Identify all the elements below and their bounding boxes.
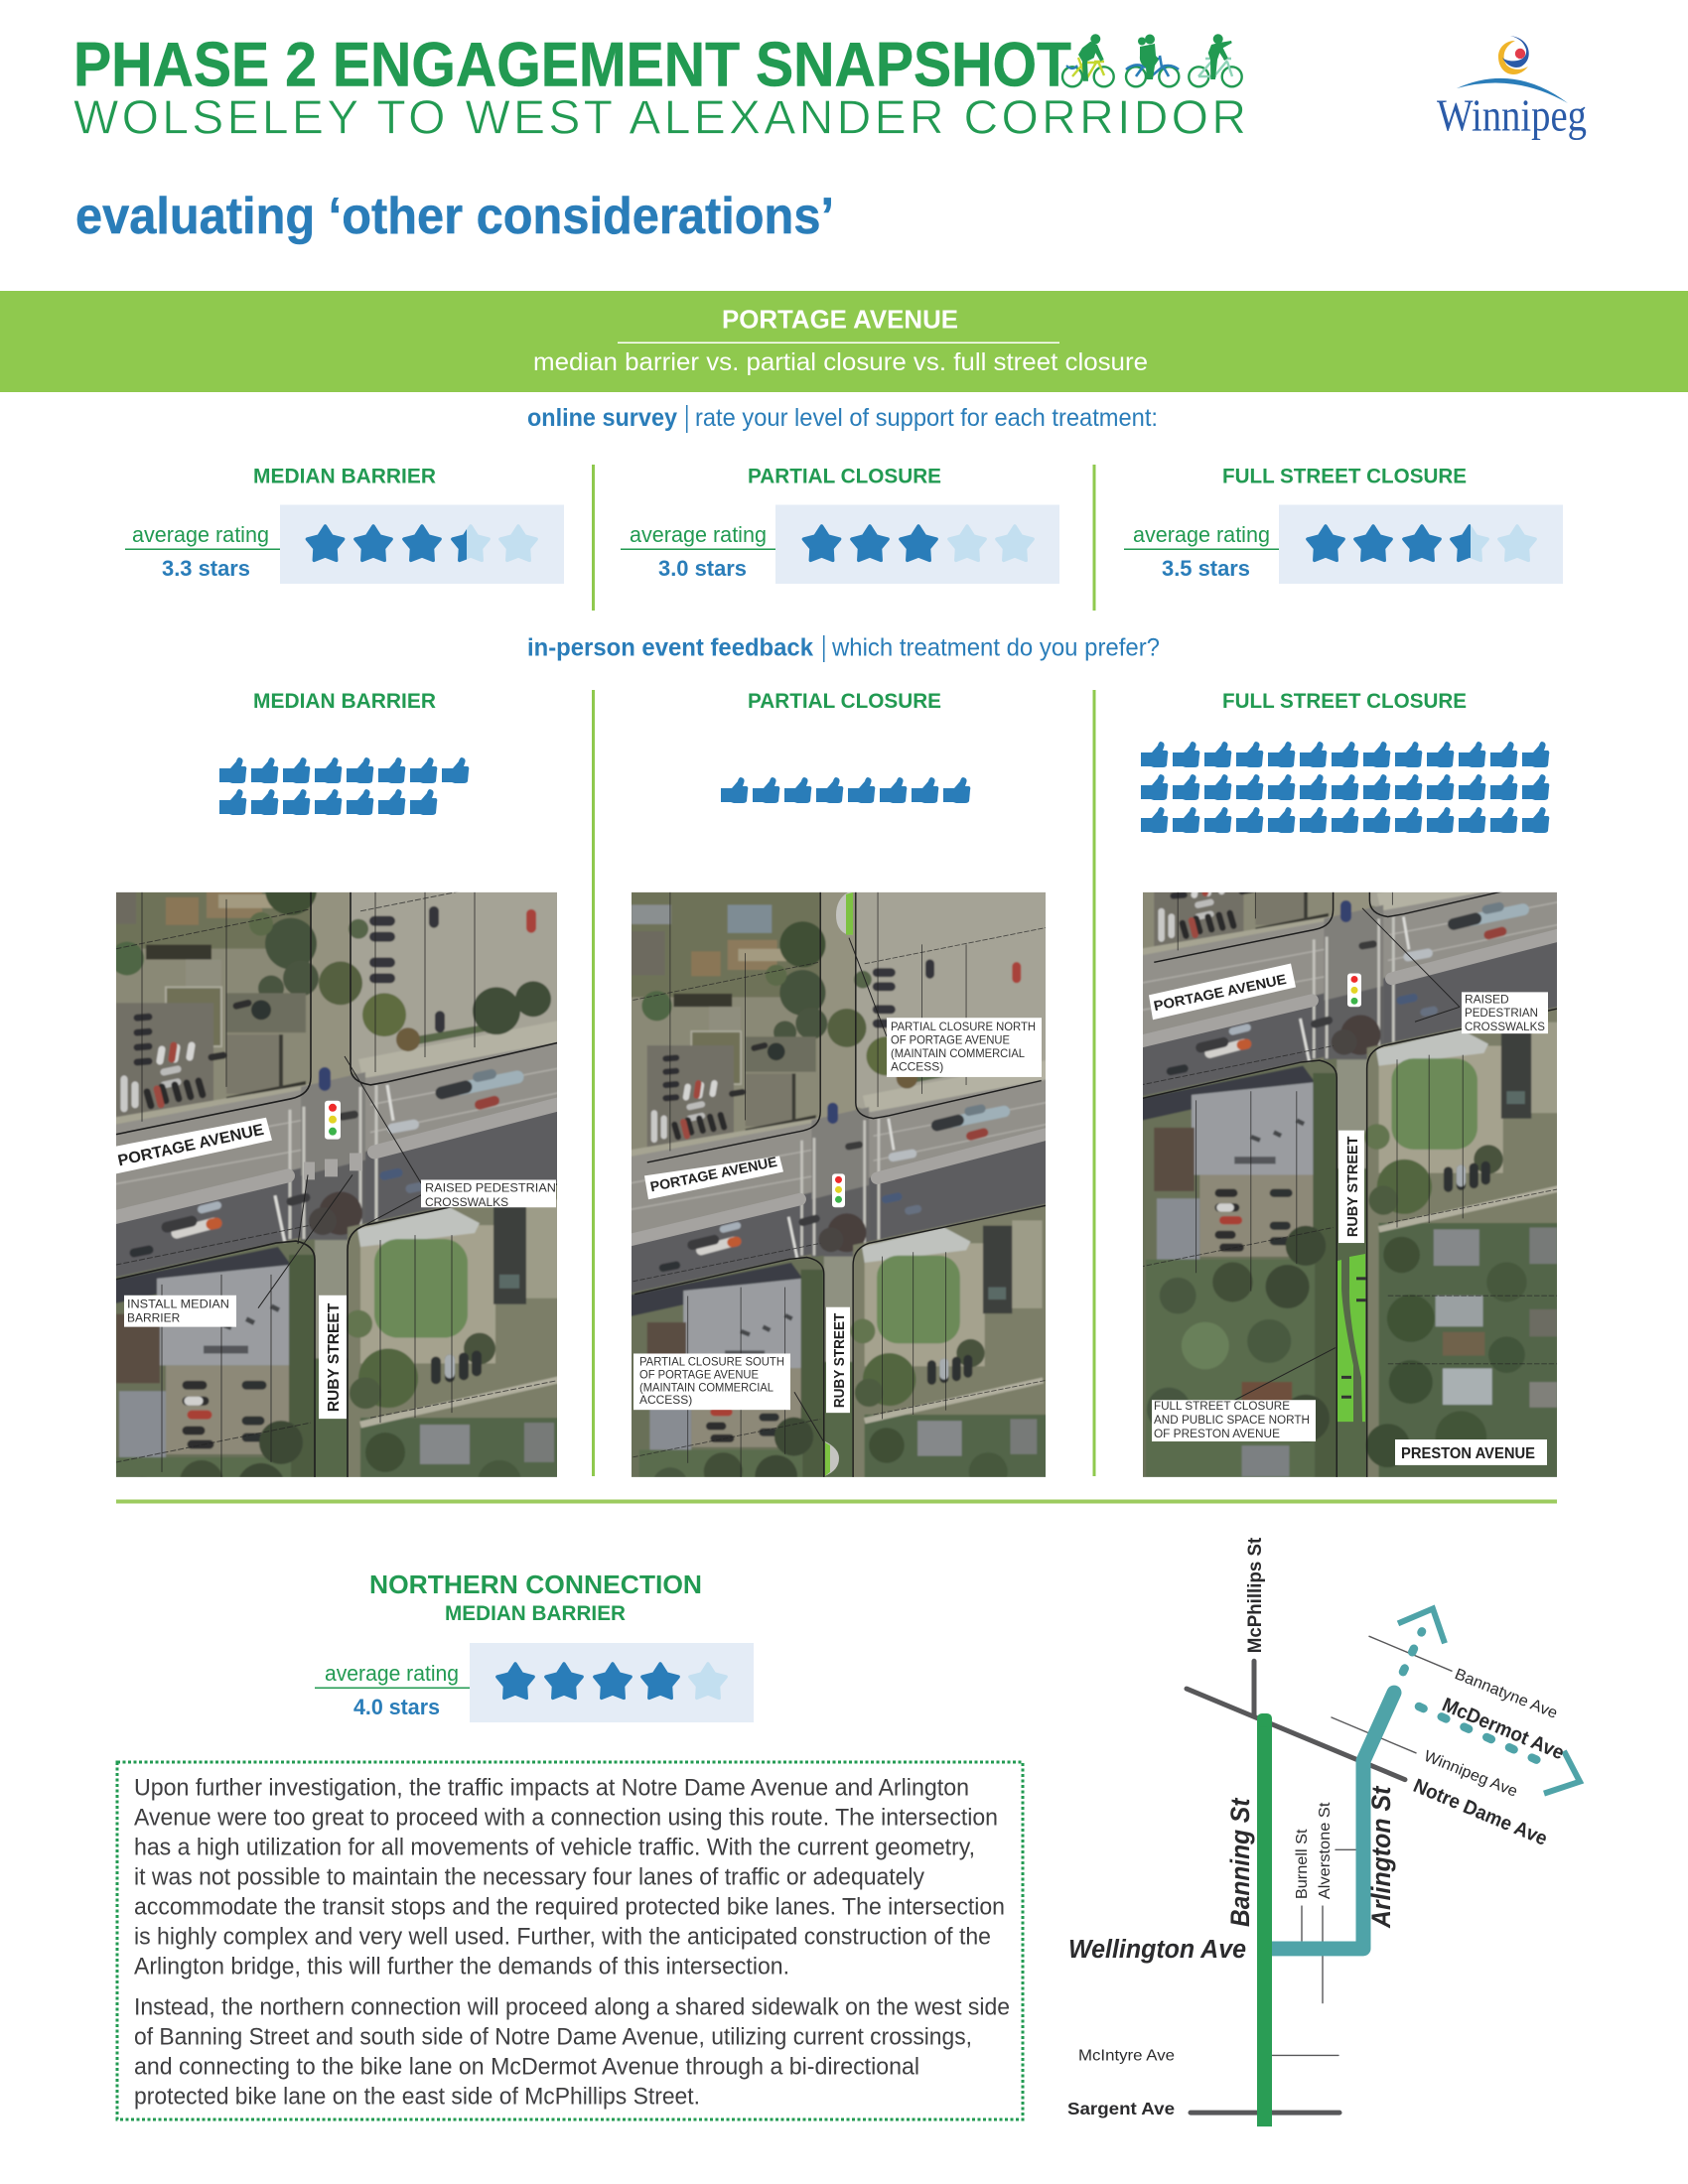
label: raised crosswalks: CROSSWALKS (1465, 1020, 1545, 1033)
banner heading: PORTAGE AVENUE (722, 304, 958, 334)
banner subheading: median barrier vs. partial closure vs. full street closure (533, 348, 1148, 376)
street labels: Burnell St (1294, 1829, 1311, 1899)
panel: online rating median barrier: 3.3 stars (162, 556, 250, 581)
panel: northern connection rating: average rating (325, 1661, 459, 1686)
heading: evaluating other considerations: evaluating ‘other considerations’ (75, 188, 834, 245)
icon: cyclist with mint bike (1189, 34, 1242, 86)
label: install median barrier: BARRIER (127, 1311, 181, 1325)
logo: City of Winnipeg: Winnipeg (1437, 89, 1587, 141)
street labels: McIntyre Ave (1078, 2047, 1175, 2064)
panel: online rating full street closure (1124, 465, 1563, 584)
map: partial closure aerial (632, 891, 1046, 1477)
text block: explanation: it was not possible to maintain the necessary four lanes of traffic or adequately (134, 1863, 924, 1890)
label: partial closure north: (MAINTAIN COMMERCIAL (891, 1046, 1025, 1060)
subtitle: WOLSELEY TO WEST ALEXANDER CORRIDOR (73, 91, 1246, 144)
label: full street closure: OF PRESTON AVENUE (1154, 1427, 1280, 1440)
panel: online rating partial closure (621, 465, 1059, 584)
panel: in-person votes partial closure (721, 690, 970, 803)
text block: explanation: and connecting to the bike lane on McDermot Avenue through a bi-directional (134, 2053, 919, 2080)
panel: in-person votes full street closure (1141, 690, 1549, 833)
label: Preston Avenue: PRESTON AVENUE (1401, 1445, 1535, 1462)
label: Preston Avenue (1395, 1439, 1547, 1465)
label: partial closure south: OF PORTAGE AVENUE (639, 1367, 759, 1381)
online survey heading: online survey (527, 404, 677, 432)
label: install median barrier: INSTALL MEDIAN (127, 1297, 229, 1311)
panel: online rating full street closure: FULL STREET CLOSURE (1222, 465, 1467, 488)
panel: online rating partial closure: average rating (630, 522, 767, 547)
panel: in-person votes full street closure: FULL STREET CLOSURE (1222, 690, 1467, 713)
text: rate your level of support for each treatment: (695, 404, 1158, 432)
label: Ruby Street (319, 1296, 347, 1419)
label: partial closure north (887, 1018, 1042, 1077)
panel: northern connection rating: 4.0 stars (353, 1695, 440, 1719)
label: raised crosswalks (1462, 992, 1548, 1033)
label: raised crosswalks: RAISED (1465, 992, 1509, 1006)
label: Ruby Street (826, 1307, 850, 1413)
panel: in-person votes median barrier: MEDIAN BARRIER (253, 690, 436, 713)
label: Ruby Street: RUBY STREET (831, 1313, 848, 1408)
label: Portage Avenue: PORTAGE AVENUE (116, 1122, 265, 1169)
label: raised pedestrian crosswalks (421, 1179, 556, 1207)
street labels: Banning St (1225, 1798, 1255, 1927)
label: raised crosswalks: PEDESTRIAN (1465, 1006, 1538, 1020)
panel: Portage Avenue banner (0, 291, 1688, 392)
street labels: Winnipeg Ave (1421, 1748, 1520, 1801)
route: Banning green (1257, 1721, 1272, 2126)
label: partial closure south: (MAINTAIN COMMERCIAL (639, 1380, 774, 1394)
streets (1187, 1636, 1452, 2113)
street labels: Alverstone St (1317, 1802, 1334, 1899)
label: Portage Avenue: PORTAGE AVENUE (648, 1154, 778, 1194)
text: which treatment do you prefer? (831, 633, 1160, 661)
panel: online rating partial closure: 3.0 stars (658, 556, 747, 581)
street labels: Arlington St (1366, 1786, 1396, 1929)
text block: explanation: of Banning Street and south side of Notre Dame Avenue, utilizing current crossings, (134, 2023, 972, 2050)
arrow: north dashed (1398, 1608, 1445, 1672)
street labels: Notre Dame Ave (1410, 1775, 1550, 1850)
panel: online rating median barrier: MEDIAN BARRIER (253, 465, 436, 488)
traffic light (832, 1173, 845, 1207)
label: raised pedestrian crosswalks: CROSSWALKS (425, 1195, 508, 1209)
logo: City of Winnipeg (1437, 36, 1587, 141)
label: Ruby Street (1338, 1131, 1364, 1243)
text block: explanation: has a high utilization for all movements of vehicle traffic. With the current geometry, (134, 1834, 975, 1860)
street labels: Bannatyne Ave (1452, 1666, 1560, 1722)
street labels (1067, 1537, 1567, 2118)
label: partial closure south: ACCESS) (639, 1393, 692, 1407)
map: full street closure aerial (1143, 891, 1557, 1477)
traffic light (1347, 973, 1361, 1007)
in-person feedback heading: in-person event feedback (527, 633, 813, 661)
text block: explanation: accommodate the transit stops and the required protected bike lanes. The intersection (134, 1893, 1005, 1920)
public space green plaza (1337, 1254, 1366, 1422)
panel: online rating partial closure: PARTIAL CLOSURE (748, 465, 941, 488)
label: partial closure south: PARTIAL CLOSURE SOUTH (639, 1354, 784, 1368)
text block: explanation: protected bike lane on the east side of McPhillips Street. (134, 2083, 700, 2110)
label: partial closure north: OF PORTAGE AVENUE (891, 1033, 1010, 1047)
arrow: east dashed (1419, 1706, 1580, 1794)
icon: three cyclists (1062, 34, 1242, 86)
text block: explanation: is highly complex and very well used. Further, with the anticipated construction of the (134, 1923, 991, 1950)
street labels: Wellington Ave (1068, 1936, 1246, 1964)
title: PHASE 2 ENGAGEMENT SNAPSHOT (73, 30, 1071, 99)
label: full street closure: AND PUBLIC SPACE NORTH (1154, 1413, 1310, 1427)
text block: explanation: Arlington bridge, this will further the demands of this intersection. (134, 1953, 789, 1979)
text block: explanation: Avenue were too great to proceed with a connection using this route. The intersection (134, 1804, 998, 1831)
label: Portage Avenue: PORTAGE AVENUE (1152, 971, 1288, 1014)
panel: online rating full street closure: average rating (1133, 522, 1270, 547)
text block: explanation (117, 1762, 1023, 2119)
panel: online rating median barrier: average rating (132, 522, 269, 547)
label: Ruby Street: RUBY STREET (326, 1302, 343, 1412)
panel: northern connection rating (315, 1570, 754, 1722)
street labels: McPhillips St (1245, 1537, 1266, 1653)
label: partial closure north: ACCESS) (891, 1059, 943, 1073)
route: Arlington and Wellington teal (1272, 1693, 1394, 1949)
icon: cyclist with lime bike (1062, 34, 1114, 86)
label: raised pedestrian crosswalks: RAISED PEDESTRIAN (425, 1180, 556, 1194)
panel: in-person votes median barrier (219, 690, 469, 815)
panel: online rating full street closure: 3.5 stars (1162, 556, 1250, 581)
subheading: MEDIAN BARRIER (445, 1602, 626, 1625)
label: full street closure: FULL STREET CLOSURE (1154, 1399, 1290, 1413)
icon: cyclist with blue bike (1126, 34, 1179, 86)
street labels: McDermot Ave (1439, 1694, 1567, 1764)
label: Ruby Street: RUBY STREET (1344, 1137, 1361, 1237)
label: Portage Avenue (1149, 964, 1296, 1020)
map: median barrier aerial (116, 891, 557, 1477)
label: partial closure south (633, 1353, 790, 1410)
street labels: Sargent Ave (1067, 2099, 1175, 2118)
heading: NORTHERN CONNECTION (369, 1570, 702, 1599)
label: install median barrier (124, 1296, 236, 1327)
traffic light (325, 1101, 341, 1140)
panel: online rating median barrier (125, 465, 564, 584)
label: full street closure (1152, 1399, 1316, 1441)
map: northern connection route (1067, 1537, 1580, 2126)
label: partial closure north: PARTIAL CLOSURE NORTH (891, 1020, 1036, 1033)
text block: explanation: Instead, the northern connection will proceed along a shared sidewalk on the west side (134, 1993, 1010, 2020)
panel: in-person votes partial closure: PARTIAL CLOSURE (748, 690, 941, 713)
text block: explanation: Upon further investigation, the traffic impacts at Notre Dame Avenue and Arlington (134, 1774, 969, 1801)
